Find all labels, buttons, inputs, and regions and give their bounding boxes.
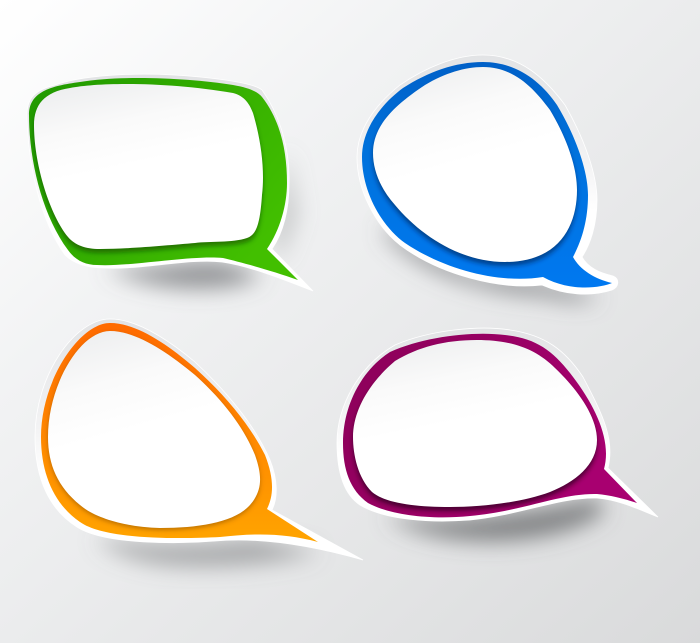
shadow: blue bubble xyxy=(385,225,600,301)
paper face: purple bubble xyxy=(353,340,597,507)
panel: orange speech bubble xyxy=(35,319,363,566)
inner shadow: blue band xyxy=(370,102,580,269)
white rim: green bubble xyxy=(27,74,313,291)
shadow: orange bubble xyxy=(95,538,320,566)
panel: green speech bubble xyxy=(27,74,313,291)
shadow: green bubble xyxy=(105,150,298,288)
shadow: purple bubble xyxy=(385,498,605,541)
white rim: orange bubble xyxy=(35,319,363,560)
paper face: blue bubble xyxy=(373,67,577,262)
panel: blue speech bubble xyxy=(357,55,618,301)
purple band xyxy=(343,334,637,517)
orange band xyxy=(41,323,318,542)
white rim: purple bubble xyxy=(337,328,658,521)
white rim: blue bubble xyxy=(357,55,618,294)
panel: purple speech bubble xyxy=(337,328,658,541)
blue band xyxy=(362,62,612,288)
paper face: orange bubble xyxy=(48,331,260,528)
green band xyxy=(29,78,298,280)
inner shadow: green band xyxy=(34,88,263,253)
inner shadow: orange band xyxy=(48,333,260,530)
paper face: green bubble xyxy=(34,84,263,249)
inner shadow: purple band xyxy=(350,368,600,514)
